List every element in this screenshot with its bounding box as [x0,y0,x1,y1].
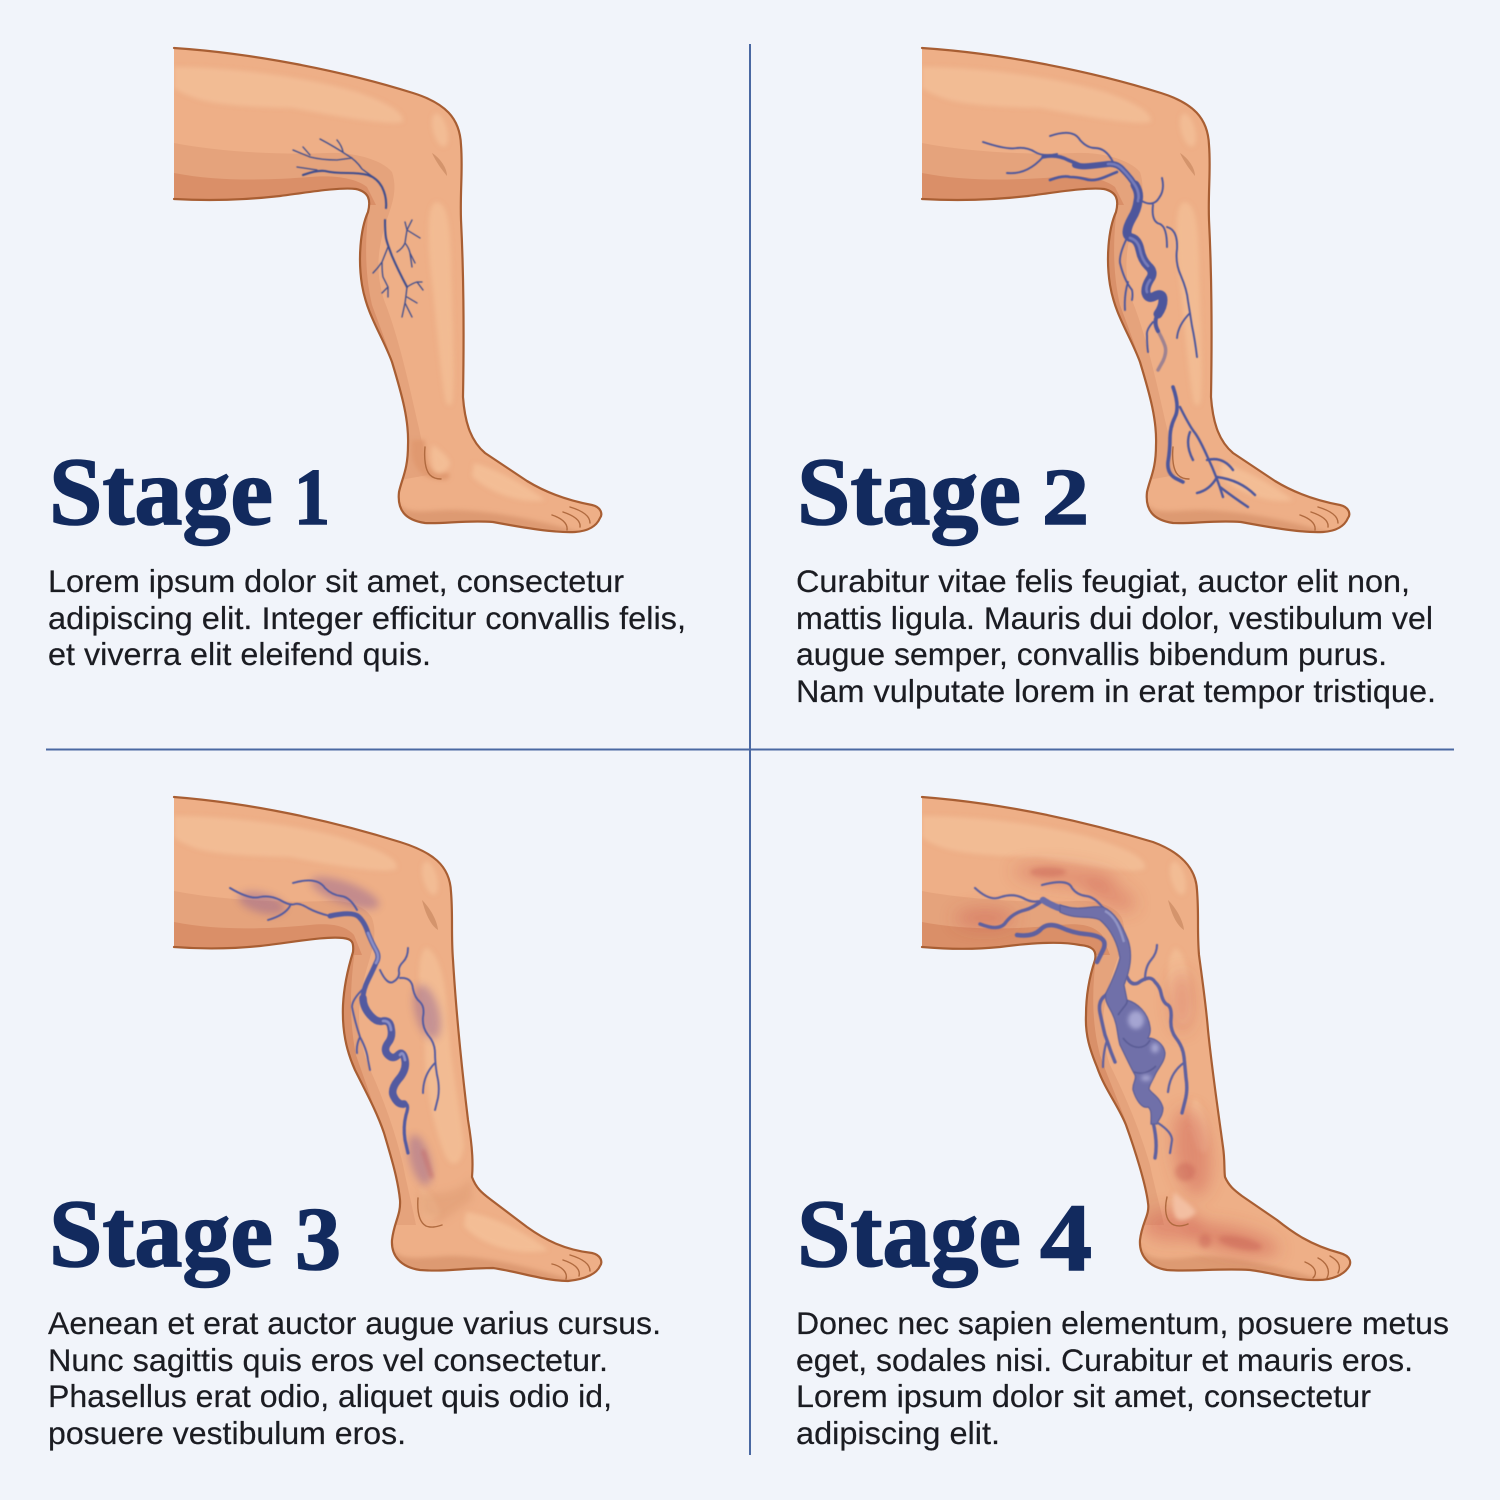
body text: stage 3: Aenean et erat auctor augue varius cursus. [48,1305,661,1341]
veins [293,139,423,317]
heading: Stage 4: 4 [1040,1184,1092,1291]
body text: stage 4: Lorem ipsum dolor sit amet, consectetur [796,1378,1371,1414]
body text: stage 2: mattis ligula. Mauris dui dolor, vestibulum vel [796,600,1433,636]
panel: stage 2 [796,48,1436,709]
panel: stage 1 [48,48,686,672]
heading: Stage 2: Stage [797,438,1021,545]
illustration: leg with spider veins [174,48,601,542]
panel: stage 3 [48,797,661,1451]
body text: stage 2: augue semper, convallis bibendum purus. [796,636,1387,672]
heading: Stage 3: Stage [49,1180,273,1287]
body text: stage 1: Lorem ipsum dolor sit amet, consectetur [48,563,624,599]
body text: stage 4 [796,1305,1449,1451]
veins [230,880,439,1153]
body text: stage 2: Nam vulputate lorem in erat tempor tristique. [796,673,1436,709]
heading: Stage 1: Stage [49,438,273,545]
body text: stage 4: adipiscing elit. [796,1415,1000,1451]
body text: stage 3 [48,1305,661,1451]
panel: stage 4 [796,797,1449,1451]
body text: stage 4: Donec nec sapien elementum, posuere metus [796,1305,1449,1341]
veins [975,882,1187,1158]
illustration: leg with enlarged veins [922,48,1349,542]
horizontal divider [46,748,1454,750]
body text: stage 1: adipiscing elit. Integer efficitur convallis felis, [48,600,686,636]
body text: stage 3: posuere vestibulum eros. [48,1415,406,1451]
body text: stage 2 [796,563,1436,709]
bulge highlights [1128,1011,1159,1081]
body text: stage 3: Nunc sagittis quis eros vel consectetur. [48,1342,608,1378]
illustration: leg with bulging veins and bruising [174,797,601,1292]
body text: stage 4: eget, sodales nisi. Curabitur et mauris eros. [796,1342,1413,1378]
illustration: leg with severe varices and skin changes [922,797,1350,1292]
vertical divider [749,44,751,1455]
skin inflammation [955,860,1282,1263]
heading: Stage 4: Stage [797,1180,1021,1287]
body text: stage 2: Curabitur vitae felis feugiat, auctor elit non, [796,563,1410,599]
heading: Stage 1: 1 [294,454,330,542]
heading: Stage 2: 2 [1042,454,1089,542]
ankle bone [1173,1192,1196,1220]
body text: stage 3: Phasellus erat odio, aliquet quis odio id, [48,1378,612,1414]
varicose bulge [1060,905,1165,1124]
bruises [236,870,446,1188]
heading: Stage 3: 3 [295,1190,341,1289]
body text: stage 1: et viverra elit eleifend quis. [48,636,431,672]
veins [983,133,1255,507]
body text: stage 1 [48,563,686,672]
